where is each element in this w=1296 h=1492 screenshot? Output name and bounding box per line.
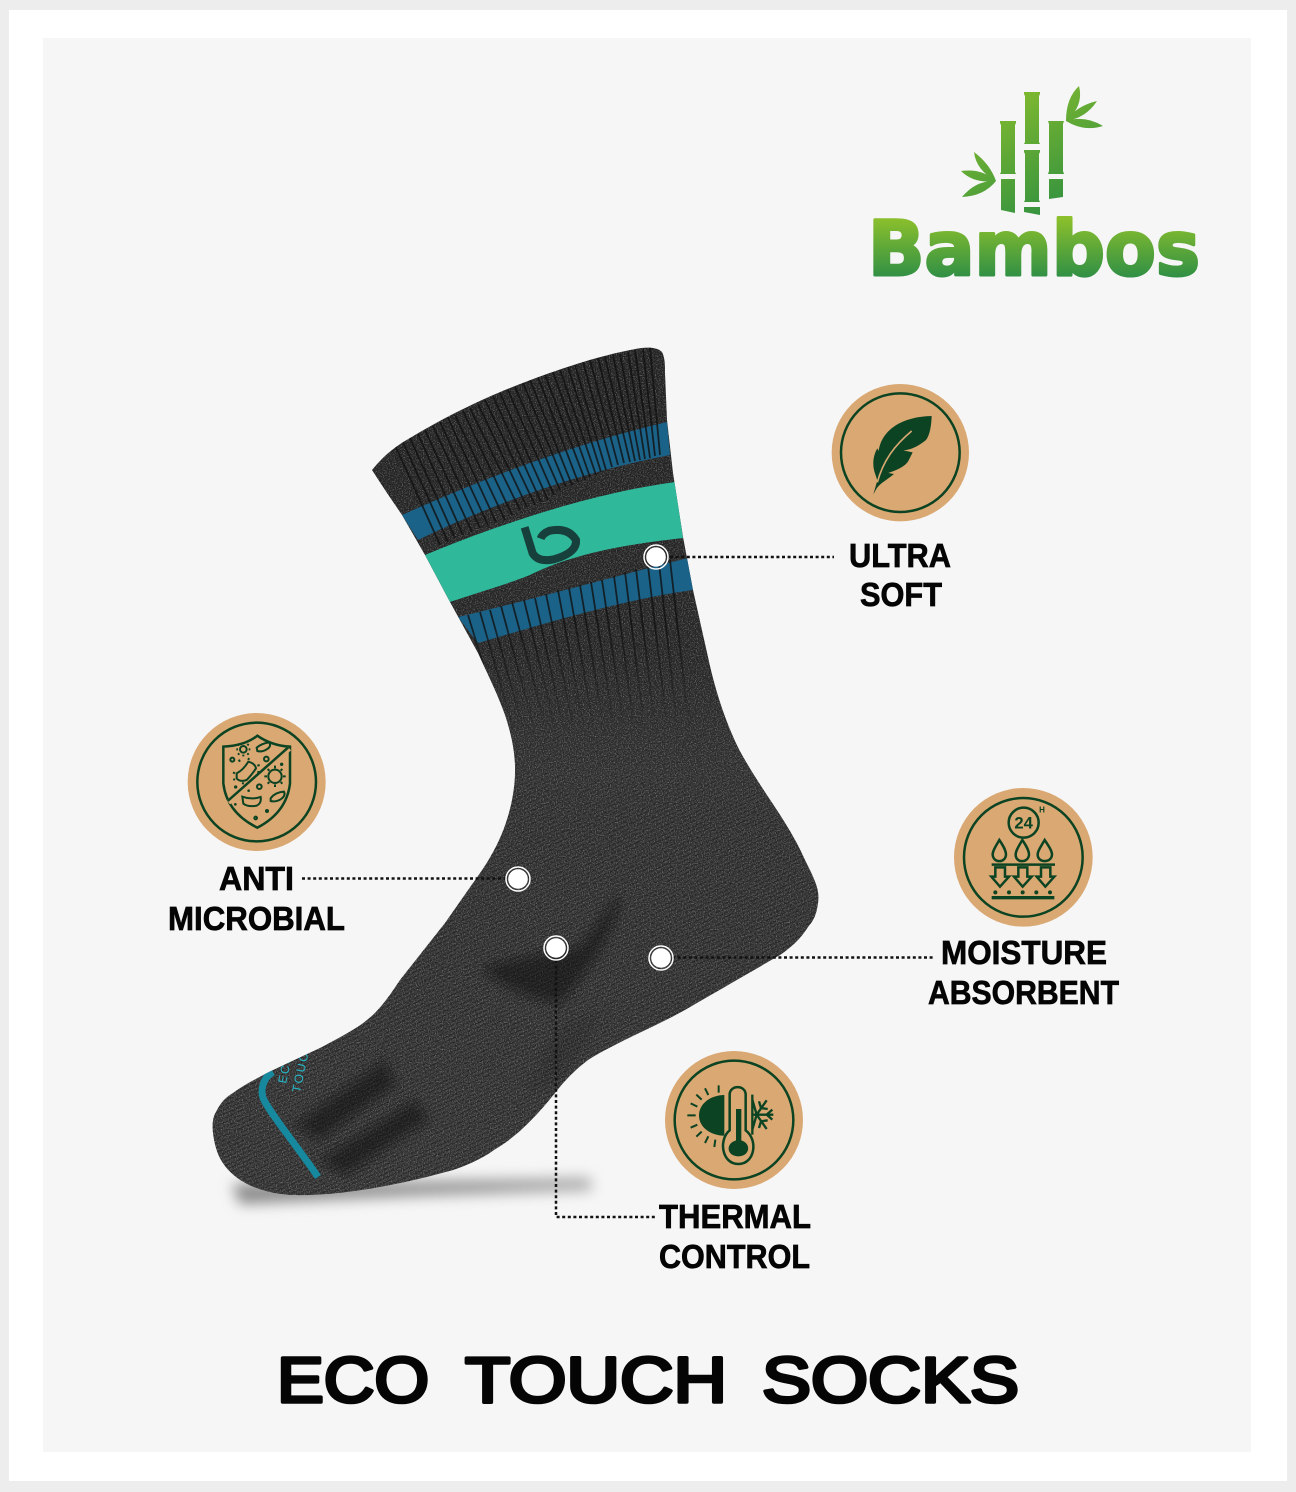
label: moisture absorbent: ABSORBENT xyxy=(928,974,1119,1011)
icon: 24h moisture xyxy=(954,788,1093,927)
sock body xyxy=(200,340,830,1210)
hotspot markers xyxy=(506,545,673,970)
icon: bamboo stalks and leaves xyxy=(961,86,1103,215)
sock shadow xyxy=(232,1178,592,1204)
stripe: wide teal xyxy=(425,482,683,602)
toe label: ECO xyxy=(275,1052,295,1085)
label: ultra soft: SOFT xyxy=(860,576,942,613)
label: ultra soft: ULTRA xyxy=(849,537,951,574)
icon: shield with microbes (anti microbial) xyxy=(188,713,326,851)
label: anti microbial: ANTI xyxy=(219,860,294,897)
wordmark: Bambos xyxy=(868,204,1200,293)
icon: 24h moisture: 24 xyxy=(1014,813,1034,832)
stripe: lower blue xyxy=(458,558,693,643)
fabric noise xyxy=(200,340,830,1210)
toe label xyxy=(278,1054,308,1092)
icon: feather (ultra soft) xyxy=(832,384,969,521)
label: anti microbial xyxy=(168,860,345,937)
product: sock illustration xyxy=(200,340,830,1210)
knit twill on foot xyxy=(212,734,818,1195)
dark foot patches xyxy=(295,895,619,1175)
title: eco touch socks: SOCKS xyxy=(762,1344,1019,1416)
title: eco touch socks xyxy=(277,1344,1019,1416)
toe label: TOUCH xyxy=(289,1039,314,1094)
teal toe seam xyxy=(262,1072,318,1177)
label: anti microbial: MICROBIAL xyxy=(168,900,345,937)
label: ultra soft xyxy=(849,537,951,613)
icon: thermometer with sun and snowflake xyxy=(665,1051,803,1189)
title: eco touch socks: TOUCH xyxy=(465,1344,727,1416)
label: thermal control: CONTROL xyxy=(659,1238,810,1275)
stripe: upper blue xyxy=(402,422,670,540)
label: moisture absorbent xyxy=(928,934,1119,1011)
brand logo: Bambos xyxy=(868,86,1200,293)
cuff ribbing xyxy=(395,348,690,735)
icon: 24h moisture: H xyxy=(1039,805,1045,814)
label: thermal control: THERMAL xyxy=(659,1198,811,1235)
label: thermal control xyxy=(659,1198,811,1275)
sock brand mark xyxy=(525,527,576,560)
label: moisture absorbent: MOISTURE xyxy=(941,934,1107,971)
title: eco touch socks: ECO xyxy=(277,1344,429,1416)
callout leader lines xyxy=(302,557,935,1217)
